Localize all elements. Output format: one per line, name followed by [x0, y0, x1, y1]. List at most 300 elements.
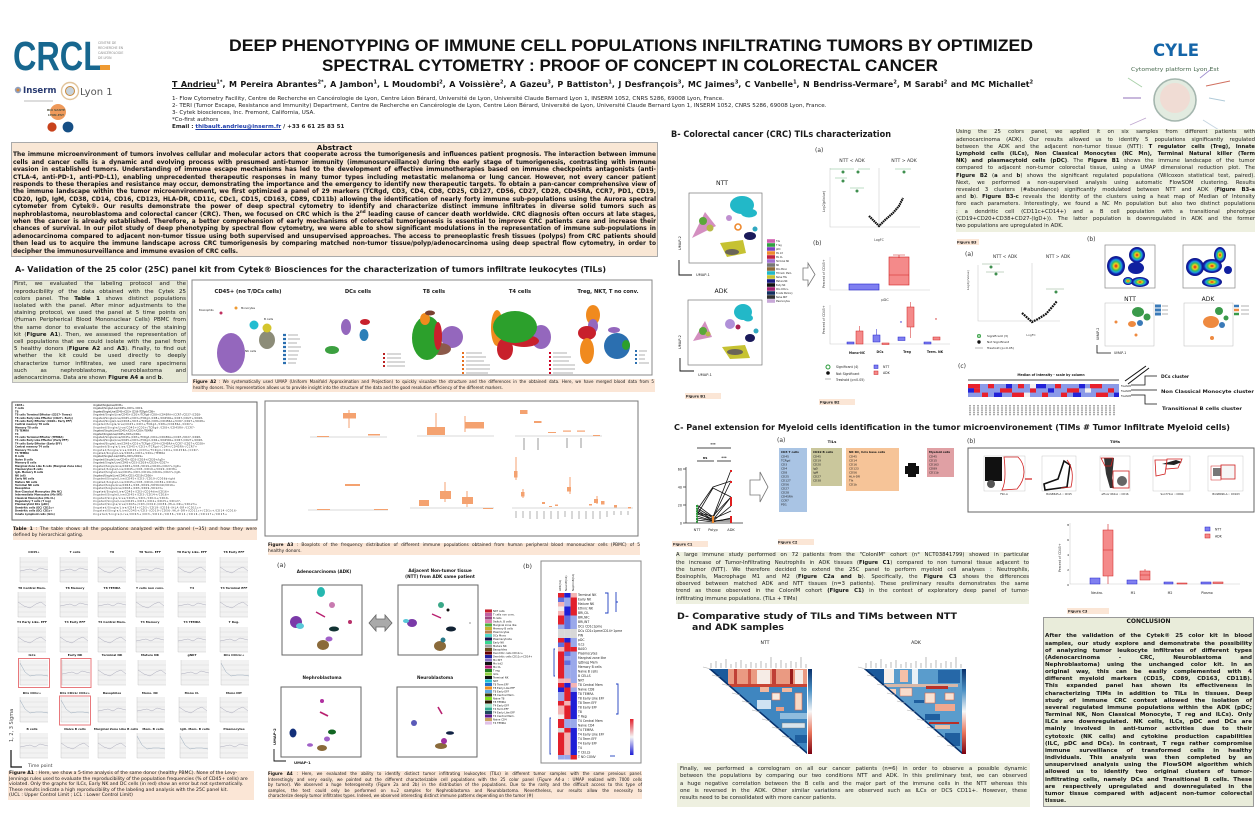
table 1: populations and gating: Ungated/Single/Live/CD45+/CD3-/CD19-/CD56+/CD16+ — [93, 481, 177, 484]
conclusion body: different myeloid markers (CD15, CD89, CD163, CD11B). — [1045, 676, 1252, 682]
conclusion body: tumor tissue compared with adjacent non-tumor colorectal — [1045, 791, 1252, 797]
row 6 of control charts: Plasmocytes — [223, 727, 245, 731]
caption: table 1 — [13, 527, 257, 540]
figure C3: boxplot: Percent of CD45+ — [1058, 543, 1062, 572]
figure C1: paired line chart: 60 — [678, 468, 682, 472]
legend: B1 populations: NK — [776, 264, 780, 267]
legend: A4 populations: Switch. B cells — [493, 620, 512, 624]
panel: CD3 T cells: CD28 — [781, 490, 789, 494]
legend: A4 populations: T8 Central Mem. — [493, 693, 515, 697]
table 1: populations and gating: Ungated/Single/Live/CD45+ — [93, 404, 123, 407]
conclusion body: Nephroblastoma) using the unchanged color kit. In an — [1045, 662, 1252, 668]
gate plot: CD163 — [1208, 456, 1243, 496]
legend: A4 populations: Terminal NK — [493, 676, 509, 680]
table 1: populations and gating: T4 cells Terminal Effector (TEMRA) — [15, 435, 64, 439]
table 1: populations and gating: T cells — [15, 406, 24, 410]
conclusion body: are respectively upregulated and downregulated in the — [1045, 784, 1252, 790]
figure A4b: heatmap: Naive CD4 — [578, 724, 594, 728]
logo: Bio Santé Lyon-Est — [47, 104, 73, 132]
logo: Lyon 1: Lyon 1 — [80, 87, 113, 98]
table 1: populations and gating: Ungated/Single/Live/CD45+/CD3+/TCRgd-/CD4+/CD45RA-/CCR7+ — [93, 446, 197, 449]
figure label: B1: Figure B1 — [686, 394, 706, 398]
legend: A4 populations: DCs Mono — [493, 634, 506, 638]
legend: A4 populations: Mo Int2 — [493, 662, 503, 666]
UMAP: adenocarcinoma — [282, 569, 362, 655]
table 1: populations and gating: Non-Classical Monocytes (Mo NC) — [15, 489, 62, 493]
UMAP: adenocarcinoma: Adenocarcinoma (ADK) — [297, 569, 351, 574]
panel: CD19 B cells: CD19 B cells — [813, 450, 833, 454]
UMAP: T8 cells: T8 cells — [423, 289, 445, 295]
text block: section A intro — [13, 281, 187, 382]
conclusion body: original way, this can be easily complemented with 4 — [1045, 669, 1252, 675]
table 1: populations and gating: Dendritic cells (DC) CD11c+ — [15, 505, 54, 509]
figure B3a: volcano plot: Log2(pValue) — [966, 270, 970, 290]
conclusion body: samples, our study explore and demonstrate the possibility — [1045, 641, 1252, 647]
axis key: sigma and time point: 1, 2, 3 Sigma — [9, 709, 15, 742]
legend: A4 populations: NKT cells — [493, 609, 505, 613]
conclusion body: mainly involved in anti-tumor activities due to their — [1045, 726, 1252, 732]
table 1: populations and gating: B cells — [15, 454, 25, 458]
figure B3a: volcano plot — [957, 239, 1070, 350]
figure A4b: heatmap: DCs CD1c1pmeCD14+1pme — [578, 629, 622, 633]
UMAP: NTT: NTT — [716, 180, 728, 187]
affiliations: Email : thibault.andrieu@inserm.fr / +33 6 61 25 83 51 — [172, 124, 344, 130]
conclusion body: This expanded panel has shown its effectiveness in — [1045, 683, 1252, 689]
legend: B1 populations: T8 Cent. Mem. — [776, 272, 792, 275]
row 3 of control charts: T Reg. — [229, 620, 239, 624]
panel: CD19 B cells: CD27 — [813, 474, 821, 478]
figure A4b: heatmap: NKT — [578, 678, 584, 682]
heading: section D: and ADK samples — [692, 623, 784, 633]
table 1: populations and gating: Ungated/Single/Live/CD45+/CD3-/CD19+ — [93, 455, 143, 458]
table 1: populations and gating: CD45+ — [15, 403, 24, 407]
panel: CD19 B cells: CD20 — [813, 462, 821, 466]
table 1: populations and gating: Marginal Zone Like B cells (Marginal Zone Like) — [15, 464, 82, 468]
figure A4b: heatmap: B CELLS — [578, 674, 591, 678]
text block: section B: revealed 3 clusters (#abundance) significantly modulated between NTT and ADK (Figure B3-a — [956, 187, 1255, 193]
panel: Myeloid cells: CD11b — [929, 470, 939, 474]
figure C2b: gating strategy — [967, 438, 1254, 512]
panel: CD3 T cells: PD1 — [781, 502, 787, 506]
boxplot: NK bottom left — [308, 484, 388, 510]
abstract body: chances of survival. In our pilot study of deep phenotyping by spectral flow cytometry, we were able to show significant modulations in the representation of immune sub-populations in — [13, 226, 656, 232]
UMAP: CD45+ cells: CD45+ (no T/DCs cells) — [215, 289, 281, 295]
figure B3a: volcano plot: Figure B3 — [957, 240, 977, 244]
cluster labels: Transitional B cells cluster — [1162, 406, 1243, 412]
row 6 of control charts: Mem. B cells — [142, 727, 164, 731]
panel: CD3 T cells: CD45 — [781, 454, 789, 458]
panel: NK DC ILCs base cells: CD16 — [849, 462, 857, 466]
figure A4b: heatmap: T8 Early Like EFF — [577, 696, 605, 700]
conclusion body: Terminal NK, Non Classical Monocyte, T reg and ILCs). Only — [1045, 712, 1252, 718]
row 6 of control charts: IgD- Mem. B cells — [180, 727, 210, 731]
conclusion body: of analyzing tumor leukocyte infiltrates of different types — [1045, 648, 1252, 654]
caption: figure A3: Figure A3 : Boxplots of the frequency distribution of different immune populations obtained from human peripheral blood mononuclear cells (PBMC) of 5 — [268, 543, 640, 548]
figure C3: boxplot: M1 — [1131, 591, 1135, 595]
panel: CD19 B cells: CD19 — [813, 458, 821, 462]
panel: Myeloid cells — [927, 448, 954, 477]
figure C2a: marker panel: TILs — [828, 439, 837, 444]
figure C1: paired line chart: 40 — [678, 486, 682, 490]
UMAP: T4 cells: T4 cells — [509, 289, 531, 295]
UMAP: CD45+ cells: Monocytes — [241, 306, 256, 310]
text block: section A intro: reproducibility of the data obtained with the Cytek 25 — [14, 289, 186, 295]
boxplot: six populations top right — [515, 410, 602, 450]
table 1: populations and gating: Early NK cells — [15, 477, 35, 481]
figure B3a: volcano plot: Not Significant — [987, 340, 1010, 344]
legend: A4 populations: T reg — [493, 668, 500, 672]
panel: CD3 T cells: CD25 — [781, 474, 789, 478]
figure B2b: pDC boxplot — [813, 240, 930, 302]
UMAP: neuroblastoma: Neuroblastoma — [417, 675, 453, 680]
text block: section B — [956, 129, 1255, 232]
figure A4b: heatmap: Ethnic NK — [578, 606, 594, 610]
text block: section B: Lymphoid cells (ILCs), Non Classical Monocytes (NC Mn), Terminal Natural killer (Term — [956, 151, 1255, 157]
figure B3a: volcano plot: (a) — [965, 251, 973, 258]
figure C3: boxplot: 2 — [1067, 568, 1069, 572]
authors: T Andrieu1*, M Pereira Abrantes2*, A Jambon1, L Moudombi2, A Voissière2, A Gazeu3, P Battiston1, J Desfrançois3, MC Jaimes3, C Vanbelle1, N Bendriss-Vermare2, M Sarabi2 and MC Michallet2 — [172, 79, 1033, 89]
figure C2a: marker panel: (a) — [777, 437, 785, 444]
panel: CD3 T cells: CD3 — [781, 462, 787, 466]
UMAP: adjacent non-tumor tissue: (NTT) from ADK same patient — [405, 574, 475, 579]
panel: CD19 B cells — [811, 448, 842, 486]
table 1: populations and gating: Ungated/Single/Live/CD45+/CD3+/CD4+/TEMRA — [93, 452, 165, 455]
text block: section A intro: kit (Figure A1). Then, we assessed the representation of — [14, 332, 186, 338]
caption: figure A1: Jennings rules used to evaluate the reproducibility of the population frequencies (% of CD45+ cells) are — [9, 777, 248, 782]
UMAP: neuroblastoma — [397, 675, 477, 757]
figure A4b: heatmap: T8 Early EFF — [577, 706, 597, 710]
caption: figure A1 — [8, 771, 254, 800]
figure label: B2: Figure B2 — [820, 400, 840, 404]
caption: figure A1: (UCL : Upper Control Limit ; LCL : Lower Control Limit) — [9, 793, 133, 798]
text block: section D: one is reversed in the ADK. Other similar variations are observed such as ILCs or DCS CD11+. However, these — [680, 788, 1027, 794]
figure C3: boxplot: NTT — [1215, 528, 1221, 532]
UMAP: ADK — [688, 288, 762, 365]
figure B2b: four populations boxplot: Term. NK — [927, 350, 944, 354]
gate plot: CD66b: eFluor 660-A :: CD16 — [1101, 492, 1129, 496]
figure A4b: heatmap: PIN — [578, 634, 584, 638]
text block: section B: : a dendritic cell (CD11c+CD14+) and a B cell population with a transitional phenotype — [956, 209, 1255, 215]
panel: NK DC ILCs base cells: CD56 — [849, 470, 857, 474]
figure A4b: heatmap: ADK(n1) — [558, 580, 562, 591]
text block: section A intro: the same donor to evaluate the accuracy of the staining — [14, 325, 186, 331]
UMAP: nephroblastoma: Nephroblastoma — [302, 675, 342, 680]
logo: Bio Santé Lyon-Est: BIO SANTÉ — [47, 107, 65, 112]
table 1: populations and gating: Ungated/Single/Live/CD45+/CD3-/CD19-/CD56-/CD14-/CD16-/CD127+/CD25+ — [93, 513, 227, 516]
table 1: populations and gating: Ungated/Single/Live/CD45+/CD3+/CD4+/CD25+/CD127- — [93, 500, 181, 503]
gate plot: CD68: Sun770-A :: CD64 — [1160, 492, 1184, 496]
legend: A4 populations: T4 TEMRA — [493, 721, 506, 725]
figure C1: paired line chart: *** — [710, 442, 716, 446]
table 1: populations and gating: Ungated/Single/Live/CD45+/CD3-/CD19-/CD56+ — [93, 474, 153, 477]
legend: B1 populations: T4s — [776, 240, 781, 243]
row 5 of control charts: DCs CD1c+ — [23, 691, 42, 695]
table 1: populations and gating: Ungated/Single/Live/CD45+/CD3-/CD19-/CD56bright — [93, 478, 175, 481]
UMAP: DCs cells: DCs cells — [345, 289, 371, 295]
arrow: C1 to C2 — [750, 472, 768, 502]
text block: section B: between the ADK and the adjacent non-tumor tissue (NTT): T regulator cells (Treg), Innate — [956, 144, 1255, 150]
conclusion body: tissue. — [1045, 798, 1066, 804]
row 2 of control charts: T8 TEMRA — [104, 586, 121, 590]
figure C3: boxplot: 4 — [1067, 553, 1069, 557]
figure A4b: heatmap: IgDneg Mem — [578, 660, 598, 664]
legend: B1 populations: Mo CL — [776, 256, 783, 259]
figure label: C2 — [778, 539, 814, 545]
figure C3: boxplot: Neutro. — [1091, 591, 1103, 595]
legend: A4 populations: Basophiles — [493, 648, 508, 652]
text block: section A intro: First, we evaluated the labeling protocol and the — [14, 281, 186, 287]
figure B1: UMAPs NTT and ADK — [678, 180, 793, 377]
table 1: populations and gating: T4 TEMRA — [15, 451, 29, 455]
legend: B2 — [825, 365, 891, 382]
figure C3: boxplot: ADK — [1215, 534, 1223, 538]
legend: B1 populations: Terminal NK — [776, 260, 790, 263]
row 1 of control charts: T8 Term. EFF — [139, 550, 161, 554]
table 1: populations and gating: Memory T4 cells — [15, 448, 38, 452]
axis keys: UMAP: UMAP-1 — [696, 273, 710, 277]
logo: CYLE cytometry platform: Cytometry platform Lyon Est — [1131, 67, 1219, 73]
legend: A4 populations: Mature NK — [493, 644, 507, 648]
UMAP: NTT — [689, 180, 762, 263]
row 1 of control charts: T cells — [70, 550, 81, 554]
text block: section C: infiltrating immune populations. (TILs + TIMs) — [676, 596, 797, 602]
UMAP: CD45+ cells: B cells — [264, 317, 274, 321]
legend: B1 populations: DCs Mono — [776, 268, 788, 271]
legend: B2: Treshold (p<0.05) — [835, 378, 865, 382]
density: ADK — [1183, 245, 1235, 303]
legend: B2: Not Significant — [836, 372, 860, 376]
abstract body: evasion in established tumors. Understanding of immune escape mechanisms has led to the development of effective immunotherapies based on immune checkpoints antagonists (anti- — [13, 167, 656, 173]
row 3 of control charts: T4 Memory — [141, 620, 159, 624]
legend: A4 populations: B cells — [493, 616, 502, 620]
text block: section C: observed between matched ADK and NTT tissues (n=3 patients). These preliminary results demonstrates the same — [676, 581, 1029, 587]
UMAP: Treg NKT T non conv.: Treg, NKT, T no conv. — [577, 289, 639, 295]
figure A4a: tumor UMAPs: (a) — [277, 561, 286, 569]
table 1: populations and gating: Ungated/Single/Live/CD45+/CD3-/CD19-/CD56-/HLA-DR+/CD11c+ — [93, 506, 201, 509]
panel: CD3 T cells: CD3 T cells — [781, 450, 799, 454]
UMAP: adjacent non-tumor tissue: Adjacent Non-tumor tissue — [408, 568, 472, 573]
panel: CD3 T cells — [779, 448, 807, 512]
figure C3: boxplot: M2 — [1168, 591, 1172, 595]
table 1: populations and gating: Ungated/Single/Live/CD45+/CD3+/TCRgd-/CD4+/CD45RA+/CCR7-/CD27-/CD28- — [93, 436, 201, 439]
row 6 of control charts: Marginal Zone Like B cells — [94, 727, 138, 731]
logo: CRCL: CENTRE DE — [98, 41, 116, 45]
figure A4b: heatmap: T4 Early Like EFF — [577, 732, 605, 736]
panel: NK DC ILCs base cells: CD1b — [849, 482, 857, 486]
boxplot: monocytes bottom middle — [410, 482, 494, 509]
UMAP: CD45+ cells — [199, 289, 301, 373]
figure C3: boxplot: 0 — [1067, 583, 1069, 587]
heading: section D: D- Comparative study of TILs and TIMs between NTT — [677, 612, 957, 622]
figure A4b: heatmap: BRi,INT — [578, 620, 589, 624]
figure A4b: heatmap: T4 Central Mem — [577, 719, 603, 723]
table 1: populations and gating: Ungated/Single/Live/CD45+/CD3+/TCRgd-/CD4+/CD45RA+/CCR7-/CD27+/CD28+ — [93, 442, 205, 445]
panel: CD3 T cells: TCRgd — [780, 458, 790, 462]
conclusion body: cytotoxic (NK cells) and cytokine production capabilities — [1045, 734, 1252, 740]
legend: A4 populations: Memory B cells — [493, 626, 513, 630]
figure A4b: heatmap: BRi,CIL — [578, 611, 589, 615]
legend: B2: ADK — [883, 371, 891, 375]
heading: section B: B- Colorectal cancer (CRC) TILs characterization — [671, 129, 891, 139]
row 1 of control charts: T8 Early Like. EFF — [177, 550, 207, 554]
row 6 of control charts: Naive B cells — [64, 727, 86, 731]
cluster labels: Non Classical Monocyte cluster — [1161, 389, 1255, 395]
figure A4b: heatmap: T8 TEMRA — [577, 692, 594, 696]
figure C1: paired line chart: ns — [703, 456, 707, 460]
row 2 of control charts: T4 — [190, 586, 194, 590]
legend: B1 populations: Naive NKT — [776, 296, 788, 299]
panel: Myeloid cells: Myeloid cells — [929, 450, 950, 454]
table 1: populations and gating: Innate Lymphoid cells (ILCs) — [15, 512, 55, 516]
abstract body: decipher the immunosurveillance and immune evasion of CRC cells. — [13, 249, 238, 255]
logo: Inserm: Inserm — [23, 86, 56, 96]
text block: section C: trend as those observed in the ColonIM cohort (Figure C1) in the context of exploratory deep panel of tumor- — [676, 588, 1029, 594]
conclusion heading: CONCLUSION — [1126, 618, 1171, 625]
abstract body: responds to these therapies and resistance may occur, demonstrating the importance and the emergency to identify new therapeutic targets. To obtain a pan-cancer comprehensive view of — [13, 182, 656, 188]
legend: B1 populations: Naive T8s — [776, 276, 788, 279]
title — [229, 37, 1033, 75]
panel: NK DC ILCs base cells: NK DC, ILCs base cells — [849, 450, 885, 454]
row 1 of control charts: T8 — [110, 550, 114, 554]
affiliations — [172, 96, 826, 130]
heading: section A: A- Validation of the 25 color (25C) panel kit from Cytek® Biosciences for the characterization of tumors infiltrate leukocytes (TILs) — [15, 264, 606, 274]
figure A4b: heatmap: T Reg — [577, 714, 587, 718]
table 1: populations and gating: Ungated/Single/Live/CD45+/CD3-/CD19+/CD20+/CD27+/IgD- — [93, 471, 181, 474]
row 2 of control charts — [18, 586, 248, 617]
table 1: populations and gating: Memory T8 cells — [15, 425, 38, 429]
legend: A4 populations: Naive T8 — [493, 696, 505, 700]
legend: A4 populations: T8 Early EFF — [493, 690, 510, 694]
panel: figure A2 UMAP — [192, 280, 652, 375]
density: NTT: NTT — [1124, 296, 1136, 303]
title: SPECTRAL CYTOMETRY : PROOF OF CONCEPT IN COLORECTAL CANCER — [322, 57, 938, 75]
row 4 of control charts: DCs CD11c+ — [224, 653, 245, 657]
figure A4b: heatmap: T8 Term EFF — [577, 701, 597, 705]
panel: CD19 B cells: IgM — [813, 470, 819, 474]
table 1: populations and gating: Ungated/Single/Live/CD45+/CD3+/TCRgd-/CD4+/CD45RA-/CCR7- — [93, 449, 199, 452]
table 1: populations and gating: Ungated/Single/Live/CD45+/CD3+/TCRgd-/CD8+/CD45RA-/CCR7+ — [93, 423, 193, 426]
title: DEEP PHENOTYPING OF IMMUNE CELL POPULATIONS INFILTRATING TUMORS BY OPTIMIZED — [229, 37, 1033, 55]
figure B3a: volcano plot: Treshold (p<0.05) — [986, 346, 1014, 350]
panel: CD3 T cells: CD127 — [781, 478, 791, 482]
panel: CD19 B cells: CD38 — [813, 478, 821, 482]
row 5 of control charts: Mono INT — [226, 691, 243, 695]
table 1: populations and gating: Ungated/Single/Live/CD45+/CD3-/CD14+/CD16- — [93, 497, 169, 500]
table 1: populations and gating: Plasmocytes B cells — [15, 467, 43, 471]
conclusion body — [1045, 633, 1252, 804]
logo: CRCL: CRCL — [13, 33, 103, 79]
clusters: ADK — [1184, 303, 1249, 346]
row 4 of control charts — [18, 653, 249, 688]
conclusion body: unsupervised analysis using the FlowSOM algorithm which — [1045, 762, 1252, 768]
figure B2b: four populations boxplot: Mono-NC — [849, 351, 866, 355]
table 1: populations and gating: T8 — [15, 409, 19, 413]
figure label: C2: Figure C2 — [778, 540, 798, 544]
legend: A4 populations — [485, 609, 532, 725]
figure B2a: volcano plot: (a) — [815, 147, 823, 154]
text block: section C — [676, 552, 1029, 604]
row 2 of control charts: T cells non conv. — [136, 586, 164, 590]
table 1: populations and gating: Ungated/Single/Live/CD45+/CD3+/TCRgd-/CD8+/CD45RA+/CCR7-/CD27+/CD28+ — [93, 420, 205, 423]
caption: figure A3 — [268, 543, 640, 555]
row 5 of control charts: DCs CD11c CD1c+ — [60, 691, 91, 695]
figure C3: boxplot: Plasmo — [1201, 591, 1213, 595]
legend: B2: Significant (4) — [836, 365, 858, 369]
conclusion body: characterizing TIMs in addition to TILs in tissues. Deep — [1045, 691, 1252, 697]
axis key: UMAP: UMAP-1 — [1114, 351, 1126, 355]
legend: B1 populations: T reg — [776, 244, 782, 247]
logo: Lyon 1 — [62, 82, 113, 100]
text block: section D — [677, 763, 1030, 807]
table 1: populations and gating: Ungated/Single/Live/CD45+/CD3+/TCRgd-/CD8+/CD45RA+/CCR7-/CD27+/CD28- — [93, 417, 203, 420]
row 5 of control charts: Mono. NC — [142, 691, 159, 695]
figure A4b: heatmap: T4 Early EFF — [577, 742, 597, 746]
figure C1: paired line chart: Polyp — [708, 528, 718, 532]
row 4 of control charts: ILCs — [28, 653, 36, 657]
legend: B1 populations — [767, 240, 793, 303]
text block: section D: a huge negative correlation between the B cells and the major part of the immune cells in the NTT whereas this — [680, 781, 1027, 787]
table 1: populations and gating: T8 TEMRA — [15, 429, 29, 433]
caption: figure A1: Figure A1 : Here, we show a 5-time analysis of the same donor (healthy PBMC). None of the Levy- — [9, 771, 237, 776]
caption: table 1: Table 1 : The table shows all the populations analyzed with the panel (~35) and how they were — [13, 527, 257, 532]
legend: A4 populations: Marginal zone like — [493, 623, 517, 627]
conclusion body: After the validation of the Cytek® 25 color kit in blood — [1045, 633, 1252, 639]
row 2 of control charts: T8 Memory — [66, 586, 84, 590]
table 1: populations and gating: Ungated/Single/Live/CD45+/CD3+/CD8+/TEMRA — [93, 430, 153, 433]
table 1: populations and gating: T4 cells Early Like Effector (Early EFF) — [15, 438, 68, 442]
table 1: populations and gating: Ungated/Single/Live/CD45+/CD3+ CD19-/TCRgd-/CD8+ — [93, 410, 155, 413]
figure A4b: heatmap: (b) — [523, 562, 532, 570]
figure A4b: heatmap: ILCs — [578, 642, 585, 646]
figure C1: paired line chart — [678, 442, 743, 532]
legend: A4 populations: T4 Early Like EFF — [493, 710, 516, 714]
row 1 of control charts: T8 Early EFF — [224, 550, 244, 554]
figure A4b: heatmap: BASO — [578, 647, 587, 651]
text block: section A intro: colors panel. The Table 1 shows distinct populations — [14, 296, 186, 302]
abstract body: adenocarcinoma compared to adjacent non-tumor tissue using both supervised and unsupervised approaches. The access to preneoplastic fresh tissues (polyps) from CRC patients should — [13, 234, 656, 240]
panel: CD19 B cells: IgD — [813, 466, 819, 470]
text block: section B: compared to adjacent non-tumor colorectal tissue, using a UMAP dimensional reduction plot. The — [956, 165, 1255, 171]
text block: section A intro: (Human Peripherical Blood Mononuclear Cells) PBMC from — [14, 317, 186, 323]
table 1: populations and gating: Naive B cells — [15, 457, 33, 461]
text block: section B: Using the 25 colors panel, we applied it on six samples from different patients with — [956, 129, 1255, 135]
boxplot: NK subsets top left — [310, 410, 387, 437]
text block: section A intro: characterize tumor infiltrates, we used rare specimens — [14, 361, 186, 367]
panel: CD19 B cells: CD45 — [813, 454, 821, 458]
figure B3a: volcano plot: LogFC — [1026, 333, 1036, 337]
legend: A4 populations: NKT — [493, 679, 498, 683]
logo: CYLE cytometry platform: CYLE — [1153, 41, 1199, 61]
figure B2a: volcano plot: NTT < ADK — [839, 158, 866, 164]
figure B2a: volcano plot: LogFC — [874, 238, 885, 242]
gate plot: CD15 — [1042, 456, 1076, 496]
logo: CRCL: DE LYON — [98, 56, 112, 60]
row 6 of control charts: B cells — [26, 727, 38, 731]
figure B3c: median intensity heatmap: FlowSOM — [1121, 390, 1131, 393]
abstract body: cells and cancer cells is a dynamic and evolving process with presumed anti-tumor immunity (immunosurveillance) during the early stage of tumorigenesis, contrasting with immune — [13, 160, 656, 166]
figure A4b: heatmap: NephroB(n2) — [571, 574, 575, 591]
figure B3a: volcano plot: Significant (3) — [987, 334, 1008, 338]
row 5 of control charts: Basophiles — [103, 691, 121, 695]
legend: B2: NTT — [883, 365, 889, 369]
figure C1: paired line chart: 0 — [680, 522, 682, 526]
figure A4b: heatmap: BRi,NIC — [578, 616, 590, 620]
logo: CRCL: RECHERCHE EN — [98, 46, 124, 50]
correlogram: ADK — [858, 640, 966, 754]
UMAP: CD45+ cells: Eosinophils — [199, 308, 214, 312]
table 1: populations and gating: Terminal NK cells — [15, 483, 40, 487]
panel: Myeloid cells: CD163 — [929, 462, 939, 466]
